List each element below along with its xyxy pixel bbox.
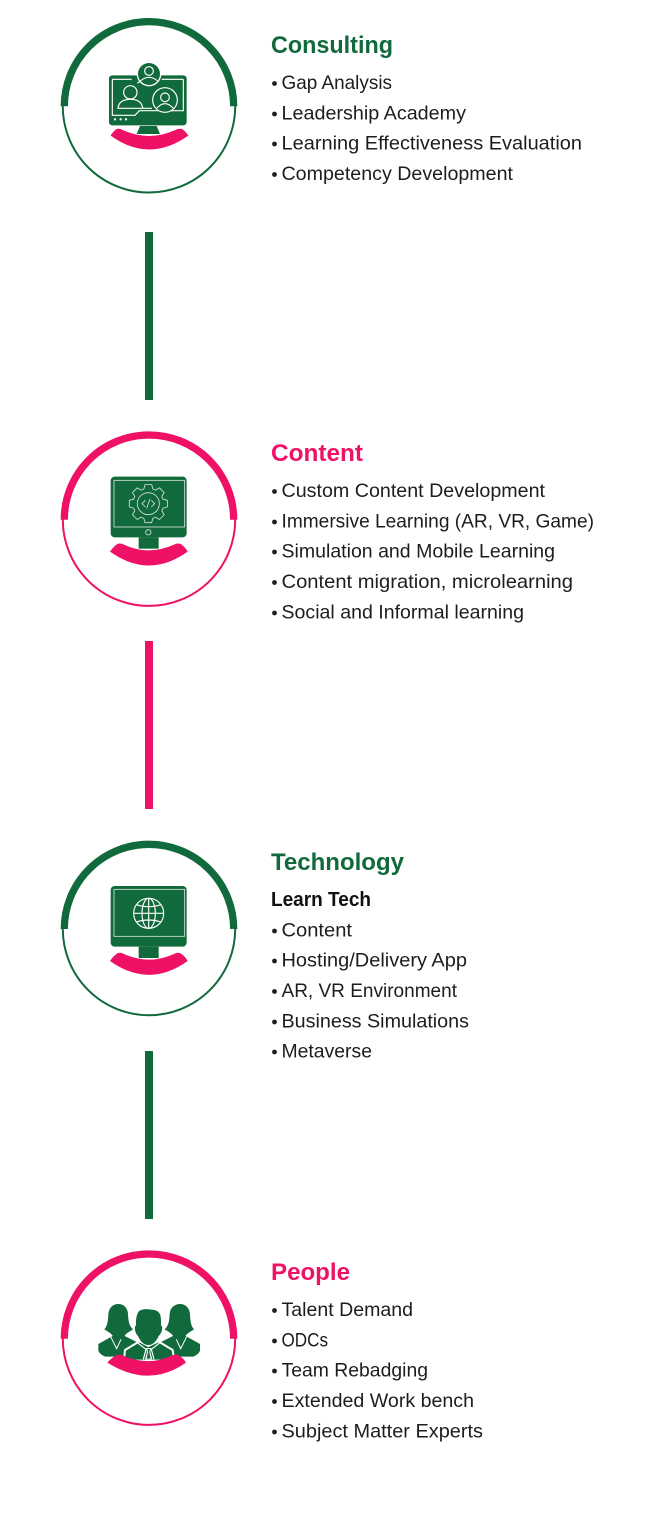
panel: technology xyxy=(63,843,469,1062)
list: content services xyxy=(272,480,594,624)
list: technology services: Business Simulations xyxy=(282,1010,469,1032)
list: consulting services: Leadership Academy xyxy=(282,102,466,124)
connector: content to technology xyxy=(145,641,153,809)
list: content services: Social and Informal learning xyxy=(282,602,524,624)
heading: Content xyxy=(271,440,363,467)
icon: team of three people xyxy=(98,1304,200,1376)
list: content services: Simulation and Mobile Learning xyxy=(282,540,555,562)
heading: Consulting xyxy=(271,32,393,59)
list: technology services: Content xyxy=(282,920,353,942)
list: people services xyxy=(272,1299,483,1442)
subheading: Learn Tech xyxy=(271,889,371,911)
connector: technology to people xyxy=(145,1051,153,1219)
content ring xyxy=(63,434,235,606)
list: consulting services: Gap Analysis xyxy=(282,72,392,94)
icon: monitor with globe xyxy=(110,886,188,975)
list: consulting services: Learning Effectiveness Evaluation xyxy=(282,132,582,154)
icon: monitor with video call participants xyxy=(109,62,188,149)
list: content services: Immersive Learning (AR, VR, Game) xyxy=(282,510,594,532)
consulting ring xyxy=(63,20,235,192)
panel: consulting xyxy=(63,20,582,192)
list: people services: Team Rebadging xyxy=(282,1360,428,1382)
panel: people xyxy=(63,1252,483,1442)
technology ring xyxy=(63,843,235,1015)
list: content services: Custom Content Development xyxy=(282,480,546,502)
list: consulting services: Competency Development xyxy=(282,163,514,185)
list: people services: Subject Matter Experts xyxy=(282,1420,483,1442)
list: people services: ODCs xyxy=(282,1330,328,1352)
list: consulting services xyxy=(272,72,582,185)
heading: Technology xyxy=(271,849,405,876)
panel: content xyxy=(63,434,594,624)
list: content services: Content migration, microlearning xyxy=(282,571,573,593)
list: technology services: Hosting/Delivery App xyxy=(282,950,467,972)
heading: People xyxy=(271,1259,350,1286)
list: people services: Talent Demand xyxy=(282,1299,413,1321)
list: technology services: AR, VR Environment xyxy=(282,980,458,1002)
icon: monitor with code gear xyxy=(110,477,188,565)
people ring xyxy=(63,1252,235,1425)
connector: consulting to content xyxy=(145,232,153,400)
list: technology services xyxy=(272,920,469,1062)
list: technology services: Metaverse xyxy=(282,1040,372,1062)
list: people services: Extended Work bench xyxy=(282,1390,474,1412)
